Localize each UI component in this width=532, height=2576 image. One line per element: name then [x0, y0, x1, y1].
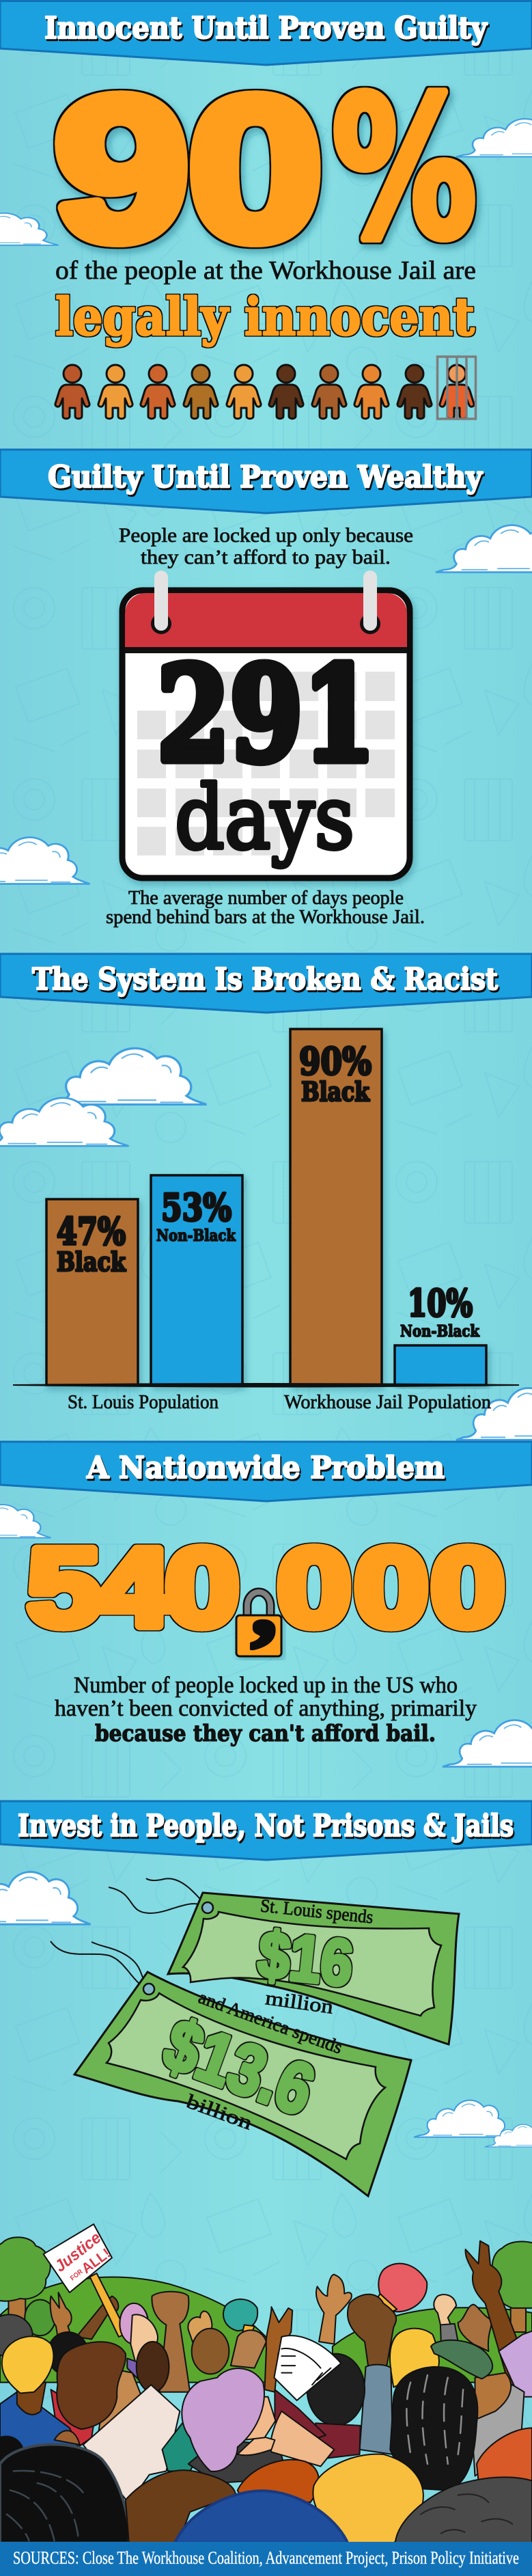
sign text: justice for all: FOR: [69, 2268, 85, 2282]
text: days: days: [175, 767, 354, 869]
bar: 90% black: 90%: [299, 1039, 372, 1083]
curly black hair: [307, 2354, 365, 2426]
text: locked up: People are locked up only because: [119, 524, 413, 547]
sleeve gray blue: [360, 2365, 393, 2454]
skin arm: [270, 2411, 334, 2466]
red pompom: [378, 2264, 427, 2312]
bar: 47% black: Black: [57, 1246, 126, 1277]
text: average number of days: spend behind bars at the Workhouse Jail.: [106, 907, 425, 928]
lilac right edge: [499, 2329, 532, 2397]
bar: 90% black: Black: [301, 1076, 370, 1107]
orange afro right: [477, 2428, 532, 2481]
megaphone: [274, 2335, 341, 2400]
text: 540000 description: haven’t been convicted of anything, primarily: [55, 1696, 477, 1721]
red behind left: [51, 2389, 95, 2446]
illustration: protest crowd: [0, 2224, 532, 2543]
stat digits: ,: [251, 1556, 277, 1654]
sign text: justice for all: ALL!: [79, 2245, 113, 2277]
big stat: 540,000 with padlock: [27, 1525, 505, 1656]
big stat: 90%: [55, 55, 477, 282]
price tag: st louis: $16: [255, 1918, 356, 2000]
face and green cap: [475, 2373, 511, 2418]
brown afro front: [126, 2470, 236, 2543]
banner: the system is broken and racist: [0, 954, 532, 1013]
price tag: america: [51, 1941, 411, 2196]
raised fist: [152, 2292, 190, 2392]
text: average number of days: [106, 888, 425, 928]
pink hair person: [120, 2303, 148, 2344]
face lilac: [244, 2397, 275, 2440]
text: 540000 description: because they can't afford bail.: [95, 1720, 436, 1746]
fist and arm: [231, 2330, 266, 2368]
back hands: [51, 2292, 72, 2337]
yellow hair: [390, 2329, 439, 2387]
hills: [0, 2277, 268, 2383]
dark shirt: [188, 2440, 288, 2483]
dark brown hair back: [137, 2342, 169, 2392]
banner: invest in people: [0, 1801, 532, 1860]
yellow hair left: [2, 2336, 53, 2393]
bar: 10% non-black: [395, 1281, 486, 1385]
lilac hair: [182, 2368, 264, 2471]
bar: 47% black: 47%: [57, 1209, 126, 1253]
bar: 53% non-black: Non-Black: [156, 1227, 236, 1245]
small fist: [434, 2294, 456, 2335]
sign: [44, 2224, 112, 2292]
bald head: [192, 2329, 229, 2374]
price tag: america: billion: [184, 2090, 255, 2135]
text: locked up: [119, 524, 413, 568]
banner: guilty until proven wealthy: Guilty Until Proven Wealthy: [48, 460, 483, 495]
icon row: ten people: [55, 357, 475, 419]
teal shirt: [162, 2422, 204, 2471]
blue cap: [175, 2491, 348, 2543]
orange afro center: [238, 2460, 319, 2502]
peace hand: [265, 2307, 292, 2392]
trees: [8, 2299, 25, 2322]
big fist and arm: [348, 2294, 396, 2366]
banner: a nationwide problem: A Nationwide Problem: [86, 1451, 445, 1485]
axis label: st louis: St. Louis Population: [68, 1392, 219, 1413]
gray afro front: [395, 2477, 532, 2543]
brown curly hair: [57, 2342, 126, 2429]
text: average number of days: The average number of days people: [128, 888, 404, 909]
calendar: [122, 571, 410, 878]
axis label: workhouse: Workhouse Jail Population: [284, 1392, 491, 1413]
clouds: [0, 119, 532, 2147]
bar: 47% black: [46, 1199, 138, 1385]
bar: 53% non-black: 53%: [161, 1186, 232, 1229]
sign stick: [90, 2273, 127, 2337]
banner: guilty until proven wealthy: [0, 450, 532, 513]
face: [98, 2368, 141, 2433]
long black hair: [390, 2367, 477, 2491]
bar: 53% non-black: [151, 1175, 242, 1385]
left person shirt: [0, 2392, 78, 2450]
footer: sources: [0, 2542, 532, 2576]
stat digits: 540: [27, 1525, 239, 1649]
dark head left: [0, 2314, 33, 2357]
text: locked up: they can’t afford to pay bail.: [141, 546, 391, 568]
banner: innocent until proven guilty: Innocent Until Proven Guilty: [44, 11, 488, 46]
yellow afro front: [313, 2454, 423, 2543]
banner: innocent until proven guilty: [0, 0, 532, 65]
price tag: america: $13.6: [154, 2004, 324, 2131]
maroon shirt: [316, 2423, 361, 2459]
open hand right: [458, 2305, 492, 2351]
text: 540000 description: Number of people locked up in the US who: [74, 1673, 458, 1698]
bar: 10% non-black: 10%: [408, 1281, 473, 1325]
spiky black hair: [48, 2332, 88, 2375]
sign text: justice for all: Justice: [51, 2228, 104, 2276]
text: of the people: of the people at the Workhouse Jail are: [55, 256, 476, 285]
gray shirt: [472, 2385, 524, 2476]
bar: 90% black: [290, 1029, 382, 1385]
bar chart: [13, 1029, 519, 1413]
bar: 10% non-black: Non-Black: [400, 1322, 480, 1341]
black afro front: [0, 2437, 23, 2467]
raised open hand: [316, 2275, 352, 2344]
stat: 291: 291: [157, 638, 376, 791]
price tag: st louis: [109, 1878, 459, 2044]
teal pompom: [223, 2299, 257, 2331]
banner: a nationwide problem: [0, 1442, 532, 1501]
stat digits: 000: [277, 1525, 505, 1649]
icon: padlock: [236, 1592, 281, 1656]
big stat: 90%: %: [332, 55, 477, 282]
price tag: america: and America spends: [196, 1986, 346, 2058]
price tag: st louis: St. Louis spends: [260, 1895, 374, 1928]
text: 540000 description: [55, 1673, 477, 1746]
text: legally innocent: legally innocent: [55, 286, 475, 347]
peace big: [466, 2241, 522, 2387]
open hand: [188, 2311, 212, 2344]
big stat: 90%: 90: [55, 55, 322, 282]
price tag: st louis: million: [264, 1987, 335, 2018]
white shirt: [83, 2385, 180, 2504]
